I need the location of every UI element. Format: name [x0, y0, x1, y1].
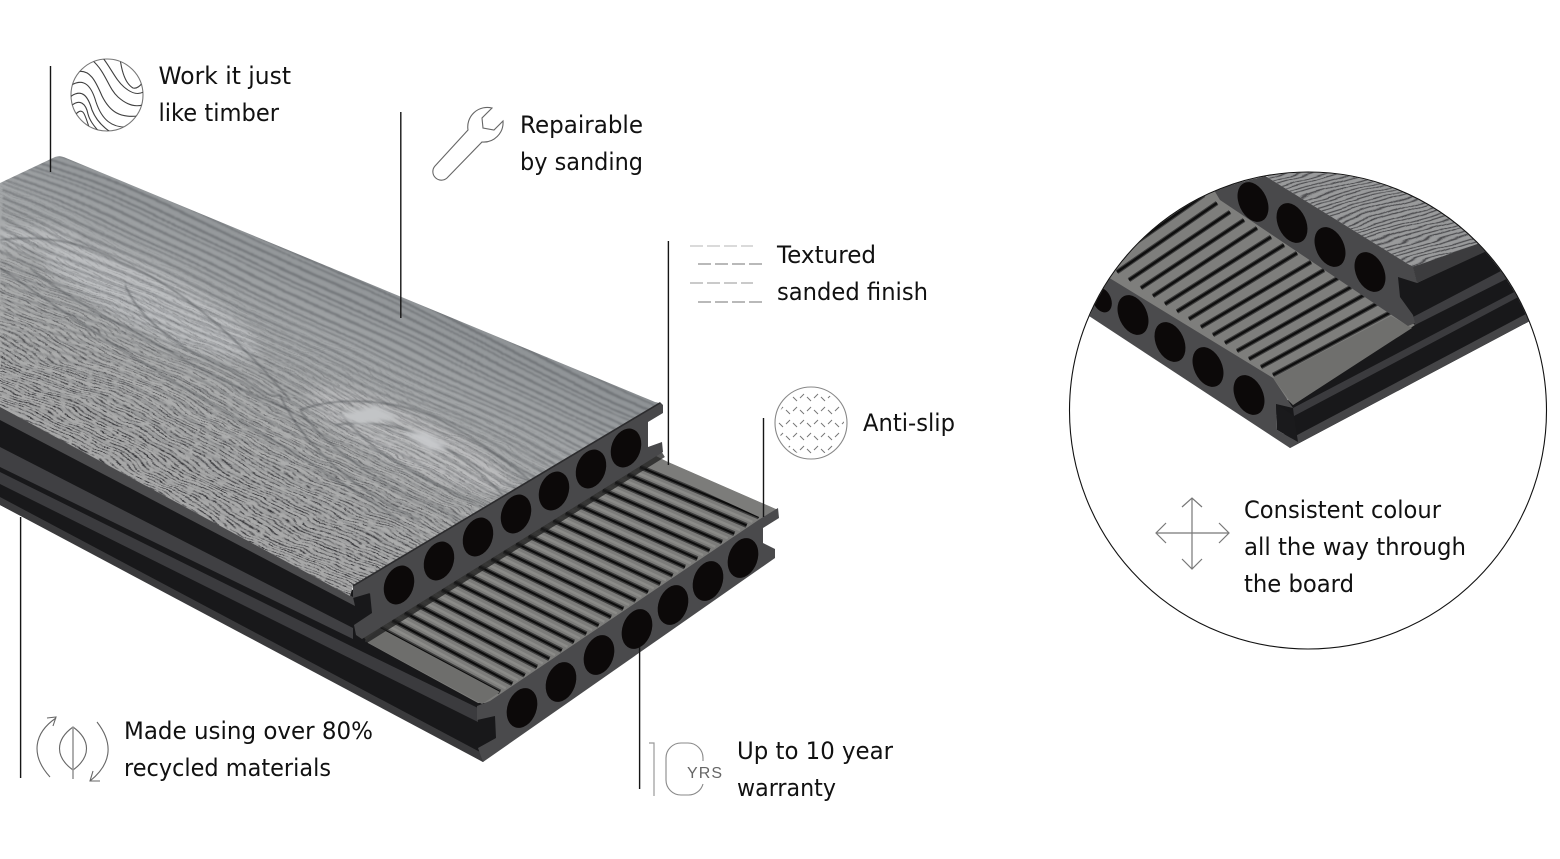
feature: work it just like timber — [70, 58, 291, 133]
icon: leaf with recycling arrows — [37, 717, 108, 781]
close-up lower end face — [1090, 278, 1298, 448]
upper board wood-grain surface — [0, 156, 658, 596]
leader line: anti-slip — [762, 418, 764, 517]
lower board end face — [477, 508, 779, 762]
circular board close-up — [1090, 172, 1529, 448]
label: the board — [1244, 570, 1354, 598]
leader line: recycled — [20, 517, 22, 778]
label: sanded finish — [777, 278, 928, 306]
icon: 10 yrs — [649, 743, 722, 796]
upper board end face — [353, 402, 663, 639]
icon: four-way arrows — [1156, 498, 1229, 569]
label: recycled materials — [124, 754, 331, 782]
label — [520, 111, 643, 176]
icon: wrench — [433, 107, 503, 180]
leader line: textured — [667, 241, 669, 465]
label — [776, 241, 928, 306]
label: Repairable — [520, 111, 643, 139]
feature: textured sanded finish — [690, 241, 928, 306]
close-up upper end face — [1215, 176, 1417, 326]
cathedral grain — [0, 238, 540, 530]
panel: consistent colour circle — [1060, 150, 1560, 649]
icon: anti-slip circle — [775, 387, 847, 459]
close-up wood surface — [1267, 172, 1485, 283]
leader line: warranty — [639, 647, 641, 789]
label: Anti-slip — [863, 409, 955, 437]
leader line: work it just like timber — [50, 66, 52, 172]
icon: 10 yrs: YRS — [687, 765, 722, 782]
feature: anti-slip — [775, 387, 955, 459]
label — [158, 62, 291, 127]
label: all the way through — [1244, 533, 1466, 561]
feature: repairable by sanding — [433, 107, 643, 180]
leader line: repairable — [400, 112, 402, 318]
label: warranty — [737, 774, 836, 802]
main board photo — [0, 140, 779, 762]
icon: wood grain circle — [70, 58, 145, 133]
feature: recycled materials — [37, 717, 373, 782]
label: like timber — [158, 99, 279, 127]
lower rails — [0, 405, 500, 762]
close-up rails — [1276, 236, 1529, 448]
lower board ribbed surface — [360, 448, 778, 704]
label — [124, 717, 373, 782]
label: Work it just — [158, 62, 291, 90]
circle outline — [1070, 172, 1546, 649]
icon: sanded dashes — [690, 246, 762, 302]
label: Textured — [776, 241, 876, 269]
close-up ribbed surface — [1104, 184, 1415, 405]
label: Consistent colour — [1244, 496, 1441, 524]
feature: warranty — [649, 737, 893, 802]
label — [1244, 496, 1466, 598]
label: Up to 10 year — [737, 737, 893, 765]
label: Made using over 80% — [124, 717, 373, 745]
upper board holes — [379, 424, 646, 609]
label — [737, 737, 893, 802]
label: by sanding — [520, 148, 643, 176]
lower board holes — [501, 534, 764, 732]
